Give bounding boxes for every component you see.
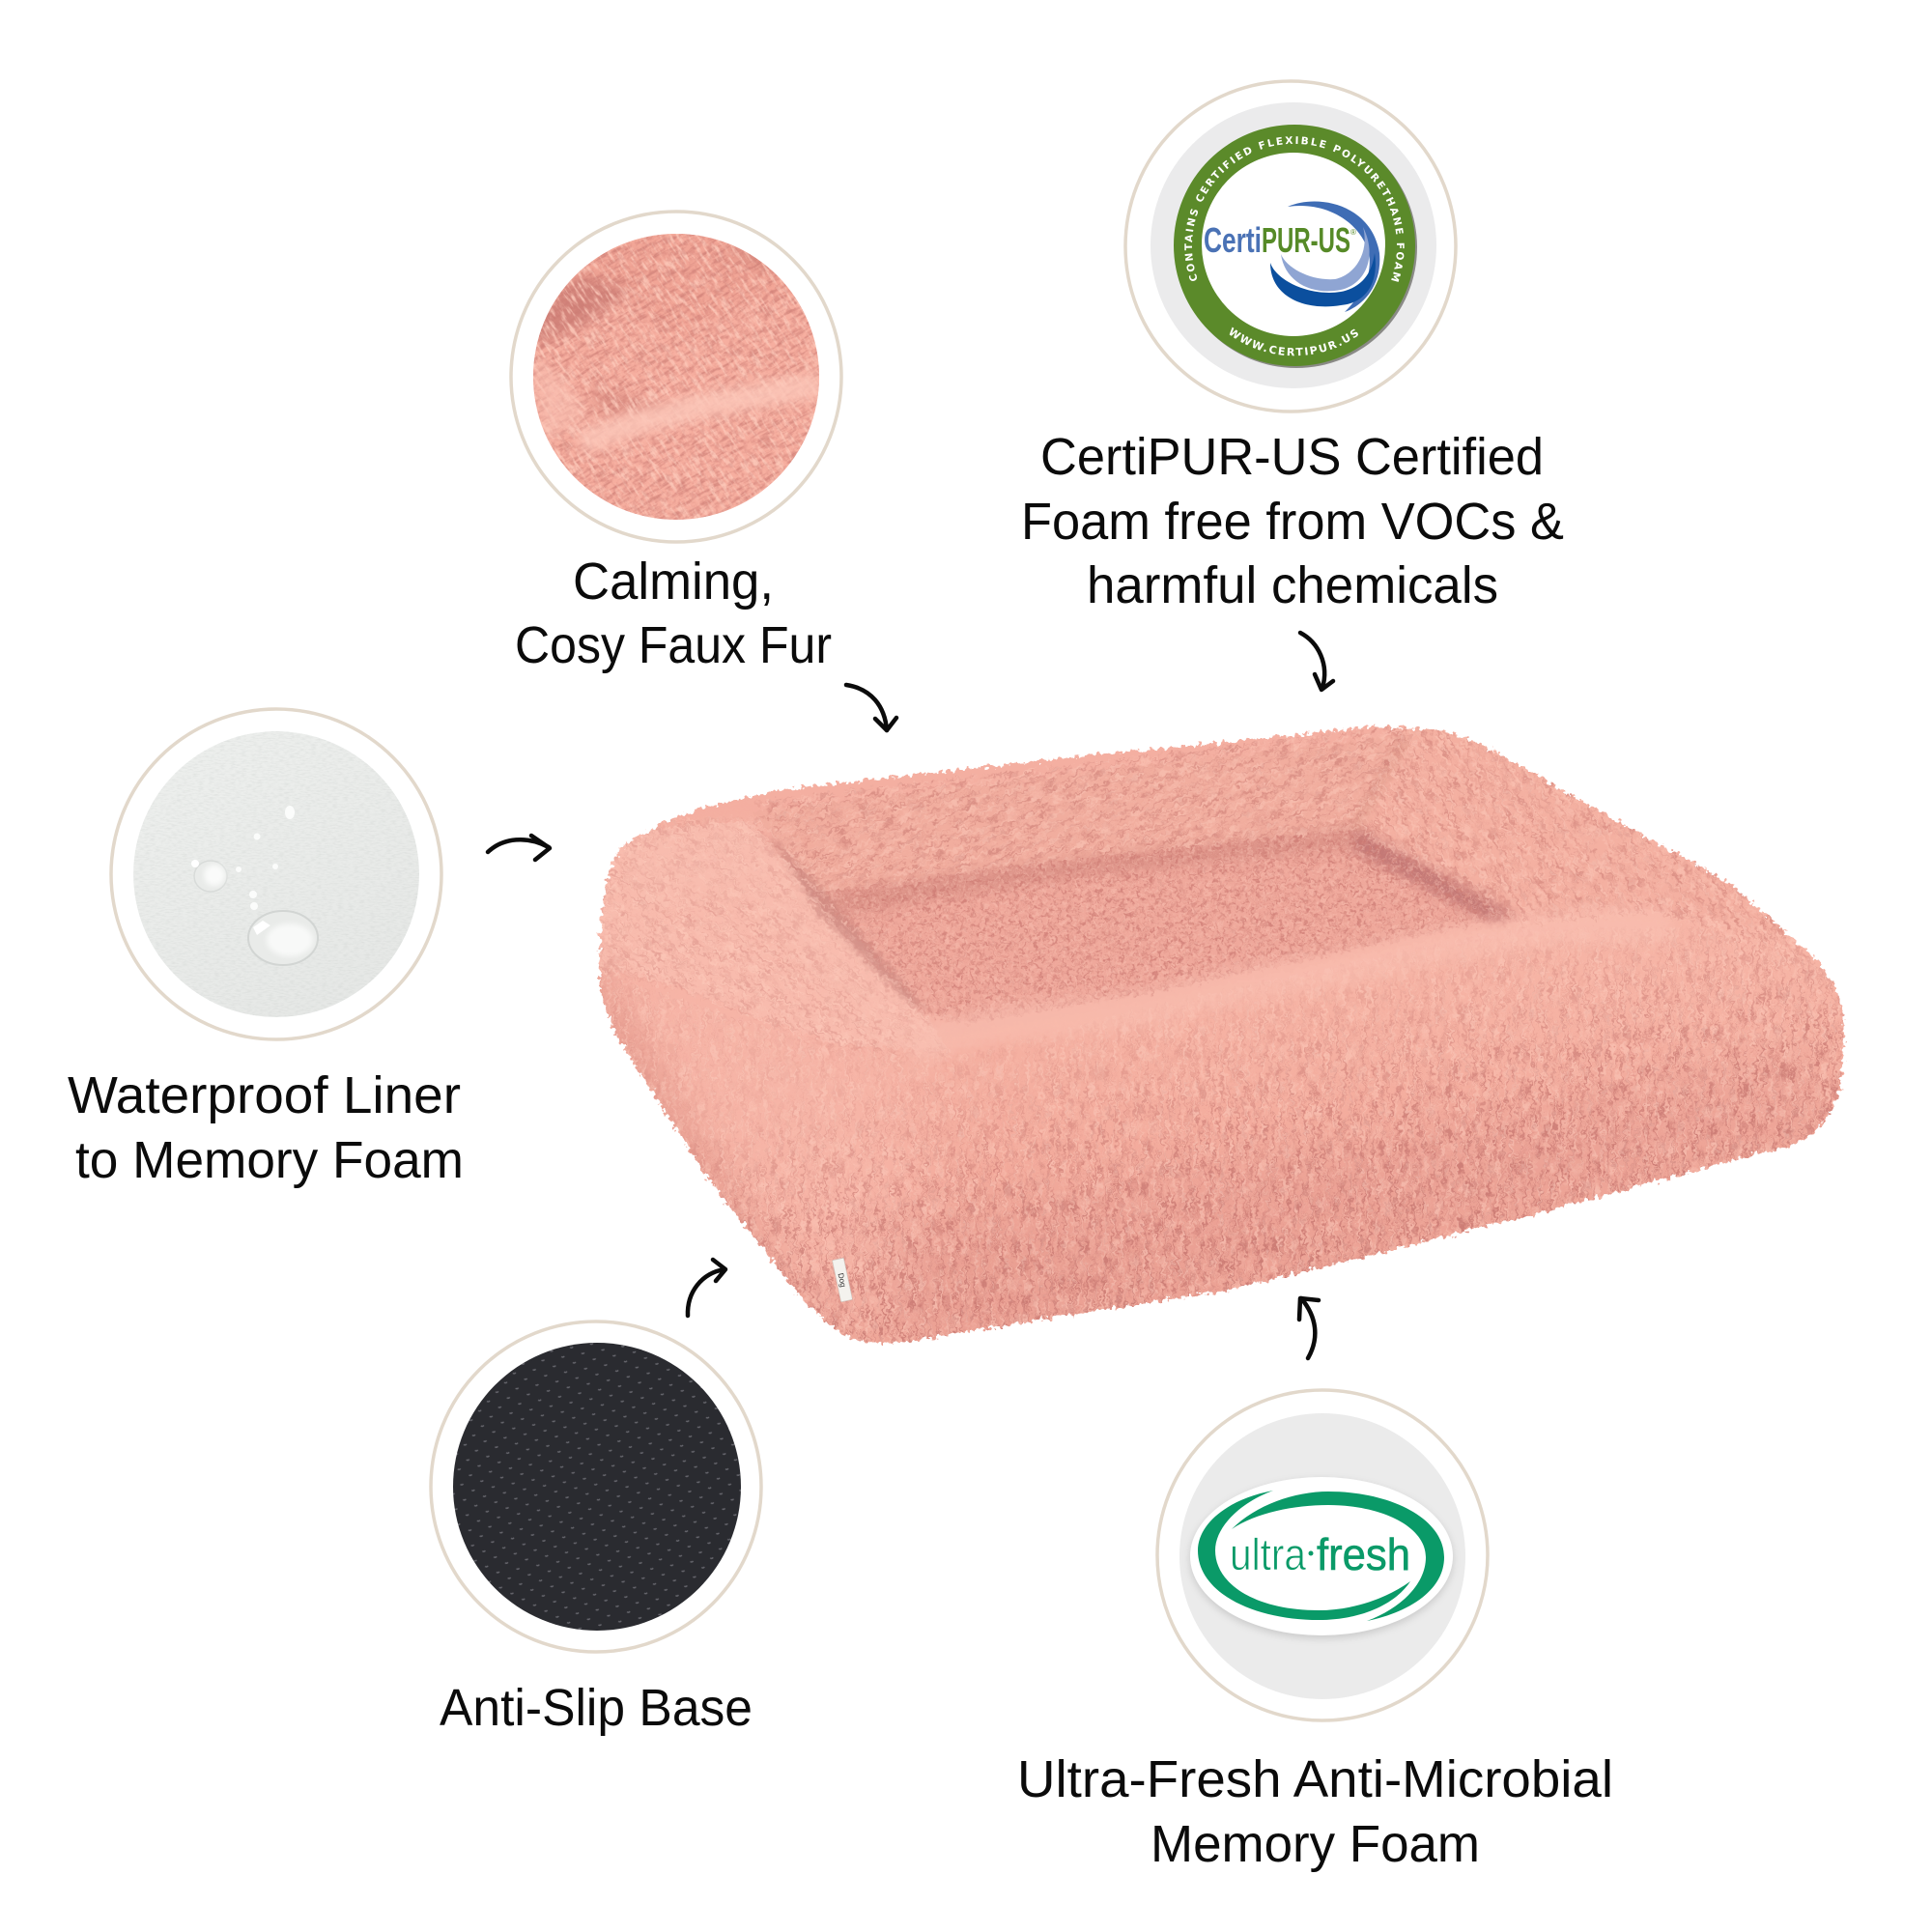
bed: left arm highlight bbox=[792, 866, 932, 1014]
bed: well shadow right edge bbox=[1352, 827, 1518, 923]
label: calming cosy faux fur: Cosy Faux Fur bbox=[515, 616, 832, 674]
feature: waterproof liner bbox=[111, 709, 441, 1039]
tiny water droplets bbox=[236, 806, 295, 910]
label: waterproof liner: Waterproof Liner bbox=[68, 1066, 461, 1124]
label: ultra-fresh foam: Memory Foam bbox=[1151, 1815, 1480, 1873]
label: calming cosy faux fur bbox=[515, 553, 832, 674]
bed: grainy well floor bbox=[823, 827, 1515, 1022]
swoosh mid blue bbox=[1288, 202, 1379, 312]
bed: left arm fur bbox=[597, 815, 951, 1059]
bed: front face bbox=[842, 929, 1847, 1345]
registered mark: ® bbox=[1350, 228, 1356, 237]
grey backing bbox=[1179, 1413, 1465, 1699]
label: waterproof liner: to Memory Foam bbox=[75, 1131, 464, 1189]
bed: back wall bbox=[753, 734, 1410, 894]
bed: well floor bbox=[822, 829, 1518, 1024]
seal ring text bottom: WWW.CERTIPUR.US bbox=[1229, 327, 1358, 355]
green swoosh left bbox=[1198, 1491, 1410, 1620]
ring bbox=[111, 709, 441, 1039]
arrow: ultra-fresh to bed bbox=[1299, 1298, 1319, 1358]
green seal shadow bbox=[1176, 127, 1417, 368]
label: ultra-fresh foam bbox=[1017, 1750, 1613, 1873]
product: pink faux fur dog bed bbox=[596, 724, 1847, 1346]
bed: back right seam bbox=[1354, 739, 1406, 829]
bed brand tag: Dog bbox=[837, 1272, 847, 1288]
label: certipur-us certified: CertiPUR-US Certified bbox=[1040, 428, 1544, 486]
arrow: waterproof liner to bed bbox=[488, 836, 550, 860]
ring bbox=[1125, 81, 1456, 412]
bed: front rim highlight bbox=[927, 925, 1656, 1045]
feature: anti-slip base bbox=[431, 1321, 761, 1652]
label: ultra-fresh foam: Ultra-Fresh Anti-Microbial bbox=[1017, 1750, 1613, 1808]
feature: calming faux fur bbox=[509, 210, 843, 544]
bed: darker zone on lower front bbox=[902, 1076, 1806, 1296]
bed: left outer side shade bbox=[597, 979, 834, 1325]
swoosh light bbox=[1281, 227, 1370, 291]
label: waterproof liner bbox=[68, 1066, 464, 1189]
logo wordmark: Certi bbox=[1204, 220, 1262, 260]
ring bbox=[431, 1321, 761, 1652]
wordmark ultra: ultra bbox=[1230, 1529, 1306, 1579]
bed: right arm fur bbox=[1354, 726, 1816, 966]
white oval bbox=[1190, 1477, 1453, 1635]
arrow: certipur to bed bbox=[1300, 633, 1333, 690]
seal ring text top: CONTAINS CERTIFIED FLEXIBLE POLYURETHANE FOAM bbox=[1184, 136, 1405, 282]
label: certipur-us certified: harmful chemicals bbox=[1087, 556, 1498, 614]
logo wordmark: PUR-US bbox=[1262, 220, 1350, 260]
green seal bbox=[1174, 125, 1415, 366]
bed: well shadow left edge bbox=[768, 833, 927, 1009]
ring bbox=[1157, 1390, 1488, 1720]
label: certipur-us certified bbox=[1021, 428, 1564, 614]
bed: front fur bbox=[580, 927, 1874, 1362]
swoosh dark bbox=[1270, 253, 1376, 306]
small water drop bbox=[194, 861, 227, 892]
feature: certipur-us badge bbox=[1123, 79, 1458, 413]
feature: ultra-fresh badge bbox=[1157, 1390, 1488, 1720]
white seal centre bbox=[1202, 153, 1385, 336]
ring bbox=[511, 212, 841, 542]
bed: right arm bbox=[1405, 726, 1785, 934]
bed: left arm top bbox=[596, 817, 924, 1047]
grey backing bbox=[1151, 102, 1436, 388]
arrow: anti-slip base to bed bbox=[688, 1260, 725, 1316]
bed: back wall fur bbox=[754, 724, 1406, 895]
wordmark fresh: fresh bbox=[1317, 1529, 1410, 1579]
label: calming cosy faux fur: Calming, bbox=[573, 553, 774, 611]
bed: left side blend bbox=[599, 966, 892, 1312]
large water drop bbox=[248, 911, 318, 965]
wordmark dot bbox=[1308, 1551, 1314, 1555]
liner swatch bbox=[133, 731, 419, 1017]
fur swatch bbox=[533, 234, 819, 520]
green swoosh right bbox=[1232, 1492, 1444, 1621]
dotted black swatch bbox=[453, 1343, 741, 1631]
bed brand tag bbox=[833, 1258, 852, 1302]
bed: well shadow back edge bbox=[822, 829, 1354, 918]
arrow: faux fur to bed bbox=[846, 685, 896, 730]
label: certipur-us certified: Foam free from VOCs & bbox=[1021, 493, 1564, 551]
label: anti-slip base: Anti-Slip Base bbox=[440, 1679, 753, 1737]
